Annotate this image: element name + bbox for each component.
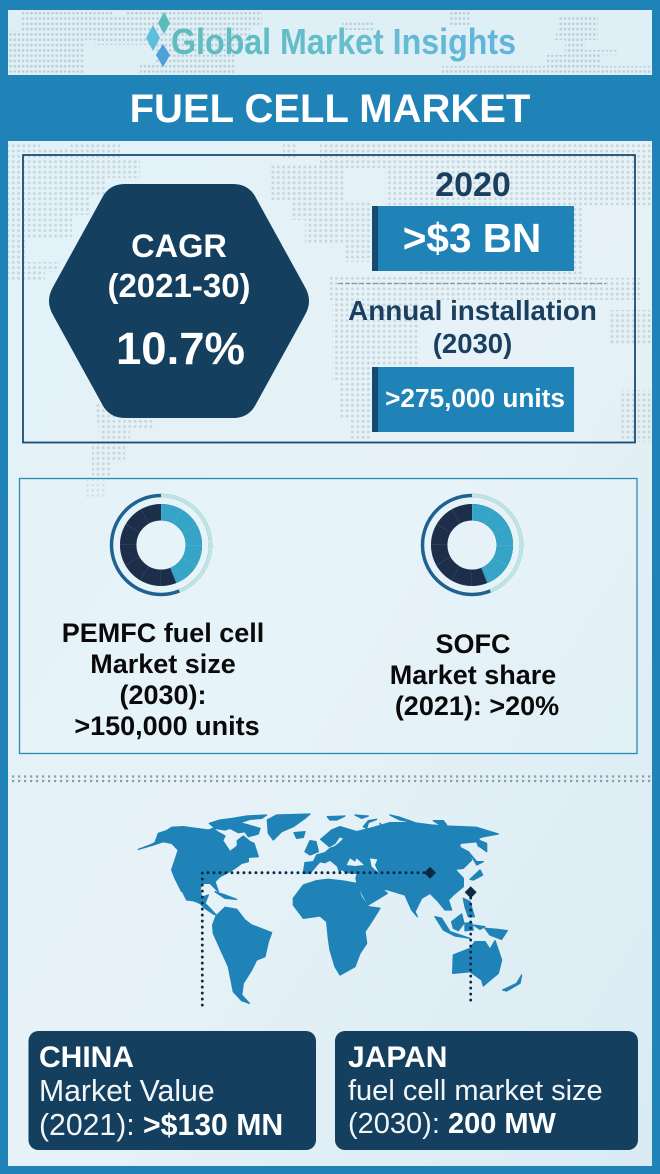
- Southeast Asia islands: [435, 898, 507, 939]
- text: PEMFC: PEMFC fuel cell: [62, 618, 264, 648]
- value box 3 BN: >$3 BN: [403, 215, 541, 261]
- callout: Japan: [335, 1031, 638, 1150]
- Iceland: [294, 832, 305, 838]
- annual installation heading: [348, 295, 597, 359]
- donut chart: PEMFC: [112, 496, 210, 594]
- logo diamonds: [146, 12, 170, 67]
- donut chart: SOFC: [422, 496, 522, 594]
- text: SOFC: [390, 629, 559, 721]
- Eurasia: [303, 823, 498, 917]
- world map: [138, 814, 522, 1007]
- Arctic islands: [209, 815, 267, 837]
- title: FUEL CELL MARKET: [130, 87, 530, 131]
- callout: China: CHINA: [39, 1041, 134, 1074]
- northern islands: [327, 815, 447, 832]
- value box units: [372, 367, 574, 432]
- text: PEMFC: Market size: [90, 649, 236, 679]
- text: PEMFC: >150,000 units: [74, 711, 260, 741]
- hexagon CAGR badge: CAGR: [131, 228, 227, 264]
- hexagon CAGR badge: (2021-30): [107, 267, 251, 304]
- Japan and Kuril islands: [468, 840, 487, 880]
- annual installation heading: Annual installation: [348, 295, 597, 326]
- text: SOFC: SOFC: [435, 629, 511, 659]
- South America: [213, 907, 272, 1003]
- text: PEMFC: [62, 618, 264, 741]
- hexagon CAGR badge: [49, 184, 309, 418]
- panel: segments: [20, 478, 637, 754]
- value box units: >275,000 units: [385, 383, 565, 413]
- background dot map: [8, 142, 652, 497]
- hexagon CAGR badge: 10.7%: [116, 323, 245, 374]
- Africa: [293, 879, 380, 975]
- frame: [23, 155, 635, 442]
- header dot map: [8, 11, 652, 75]
- value box 3 BN: [372, 206, 574, 271]
- text: SOFC: Market share: [390, 660, 556, 690]
- text: PEMFC: (2030):: [119, 680, 207, 710]
- header panel with logo: [8, 10, 652, 75]
- callout: Japan: fuel cell market size: [348, 1075, 603, 1107]
- Australia: [453, 941, 502, 986]
- Britain: [305, 841, 318, 855]
- marker: Japan: [465, 886, 477, 898]
- logo text: Global Market Insights: [171, 21, 516, 62]
- inland seas: [347, 858, 378, 873]
- frame: [20, 478, 637, 754]
- connector lines: [202, 873, 471, 1007]
- callout: Japan: (2030): 200 MW: [348, 1108, 557, 1140]
- marker: China: [424, 867, 436, 879]
- annual installation heading: (2030): [433, 328, 512, 359]
- callout: China: (2021): >$130 MN: [39, 1109, 283, 1142]
- heading 2020: 2020: [435, 166, 511, 204]
- callout: China: Market Value: [39, 1075, 215, 1108]
- Greenland: [267, 814, 310, 840]
- callout: China: [28, 1031, 316, 1150]
- text: SOFC: (2021): >20%: [395, 691, 559, 721]
- New Zealand: [503, 975, 522, 991]
- Cuba: [215, 892, 237, 899]
- panel: CAGR and market figures: [23, 155, 635, 442]
- North America: [138, 827, 258, 915]
- callout: Japan: JAPAN: [348, 1041, 447, 1074]
